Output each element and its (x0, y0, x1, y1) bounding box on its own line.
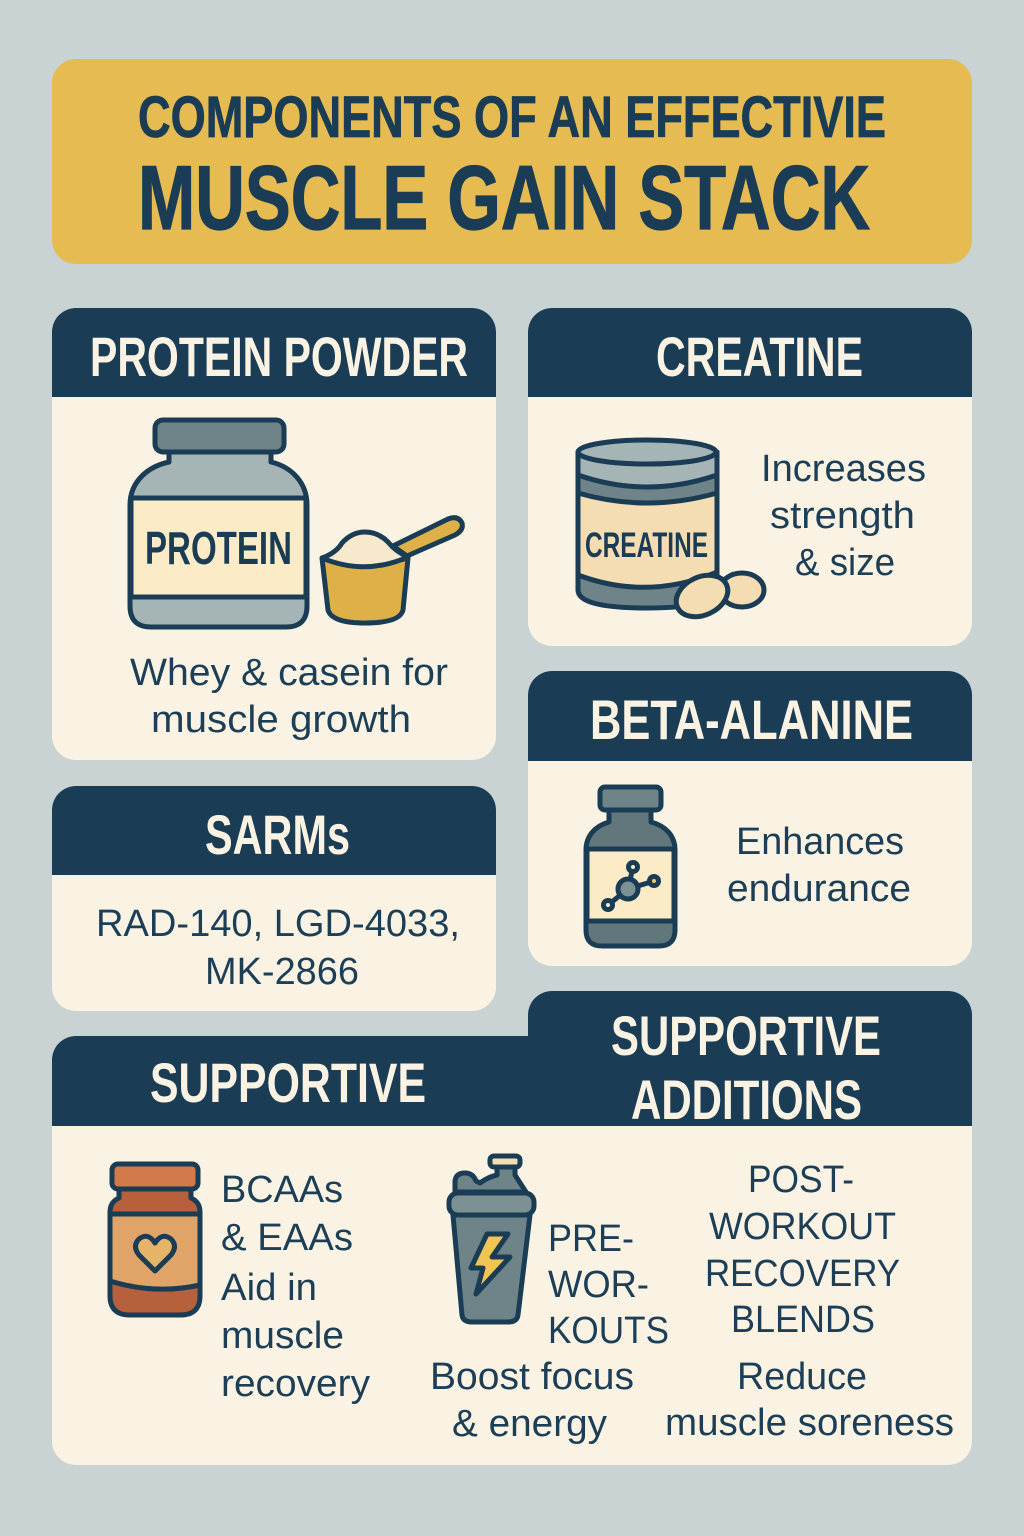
description: SARMs: MK-2866 (205, 951, 359, 993)
heading: beta-alanine: BETA-ALANINE (590, 688, 913, 751)
description: SARMs: RAD-140, LGD-4033, (96, 903, 460, 945)
description: beta-alanine: Enhances (736, 821, 904, 863)
panel: beta-alanine (528, 671, 972, 966)
tub label text: CREATINE (585, 526, 708, 565)
icon: creatine tub (578, 440, 764, 625)
panel: protein powder (52, 308, 496, 760)
icon: jar with heart (110, 1164, 200, 1315)
title banner (52, 59, 972, 264)
heading: supportive: SUPPORTIVE (150, 1051, 426, 1114)
text: BCAAs and EAAs (221, 1169, 370, 1405)
text: pre-workouts: Boost focus (430, 1356, 634, 1398)
text: pre-workouts (430, 1218, 669, 1445)
icon: scoop with powder (322, 518, 462, 623)
description: SARMs (96, 903, 460, 993)
heading: protein powder: PROTEIN POWDER (90, 325, 468, 388)
description: creatine (761, 448, 926, 584)
heading: supportive additions (611, 1004, 881, 1131)
description: beta-alanine: endurance (727, 868, 911, 910)
text: BCAAs and EAAs: recovery (221, 1363, 370, 1405)
header bar with raised tab (52, 991, 972, 1126)
icon: protein jar (130, 420, 307, 627)
description: creatine: Increases (761, 448, 926, 490)
text: post-workout recovery blends: Reduce (737, 1356, 867, 1398)
icon: bottle with molecule (586, 787, 675, 946)
panel: SARMs (52, 786, 496, 1011)
header bar: protein powder (52, 308, 496, 397)
header bar: beta-alanine (528, 671, 972, 761)
text: post-workout recovery blends: muscle soreness (665, 1402, 954, 1444)
icon: shaker bottle with lightning (449, 1156, 534, 1322)
heading: SARMs: SARMs (205, 803, 350, 866)
description: beta-alanine (727, 821, 911, 910)
description: protein powder: Whey & casein for (130, 652, 448, 694)
text: post-workout recovery blends (665, 1159, 954, 1444)
header bar: creatine (528, 308, 972, 397)
text: BCAAs and EAAs: BCAAs (221, 1169, 343, 1211)
text: pre-workouts: PRE- (548, 1218, 634, 1260)
text: post-workout recovery blends: POST- (748, 1159, 854, 1201)
description: protein powder: muscle growth (151, 699, 411, 741)
heading: supportive additions: ADDITIONS (631, 1068, 862, 1131)
text: pre-workouts: WOR- (548, 1264, 649, 1306)
text: BCAAs and EAAs: muscle (221, 1315, 344, 1357)
panel: supportive additions (52, 991, 972, 1465)
text: BCAAs and EAAs: Aid in (221, 1267, 317, 1309)
header bar: SARMs (52, 786, 496, 875)
description: creatine: strength (770, 495, 915, 537)
heading: supportive additions: SUPPORTIVE (611, 1004, 881, 1067)
icon: capsules (669, 567, 764, 625)
description: protein powder (130, 652, 448, 741)
description: creatine: & size (795, 542, 895, 584)
text: pre-workouts: & energy (452, 1403, 607, 1445)
jar label text: PROTEIN (145, 522, 292, 574)
text: post-workout recovery blends: RECOVERY (705, 1253, 900, 1295)
text: post-workout recovery blends: BLENDS (731, 1299, 875, 1341)
text: post-workout recovery blends: WORKOUT (709, 1206, 896, 1248)
panel: creatine (528, 308, 972, 646)
text: pre-workouts: KOUTS (548, 1310, 669, 1352)
text: BCAAs and EAAs: & EAAs (221, 1217, 353, 1259)
heading: creatine: CREATINE (656, 325, 863, 388)
